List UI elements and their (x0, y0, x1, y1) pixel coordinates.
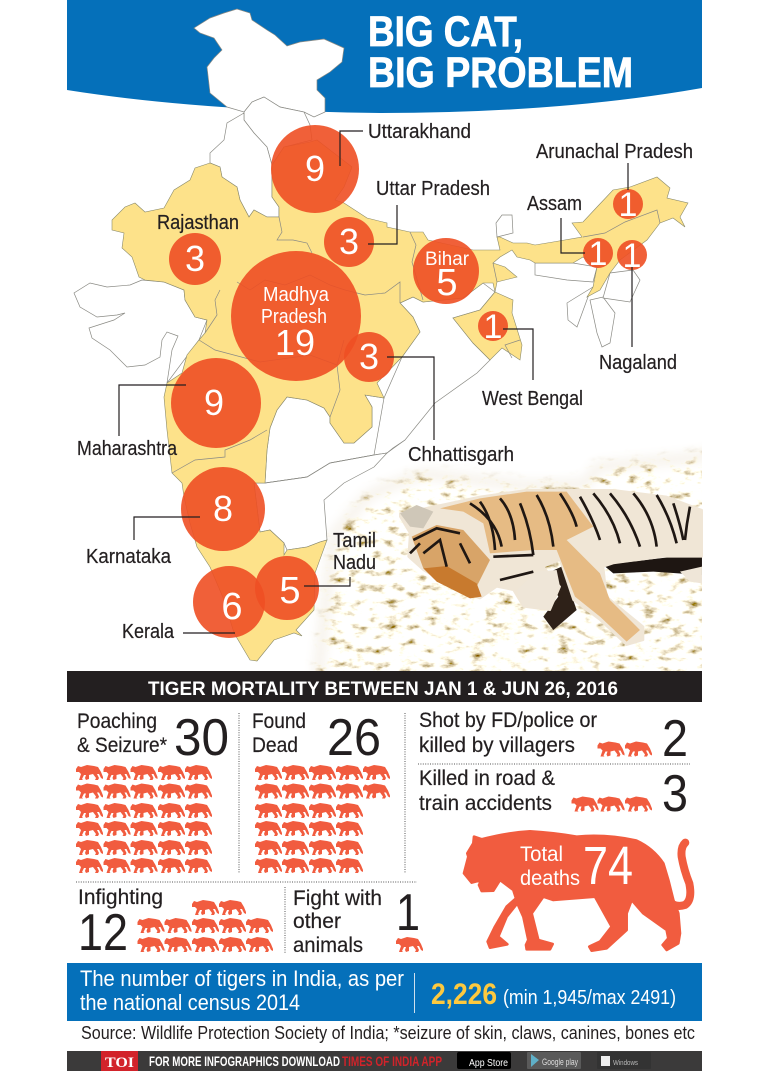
stat: poaching and seizure: Poaching (77, 710, 157, 733)
circle numbers: 5 (436, 262, 458, 304)
stat: road and train accidents (419, 765, 688, 823)
state labels: Nadu (333, 552, 376, 574)
white states: Jammu and Kashmir (194, 9, 344, 117)
footer bar: Windows (613, 1060, 638, 1067)
stat: fight with other animals: Fight with (293, 887, 382, 910)
header banner (67, 0, 702, 113)
stat: found dead: Found (252, 710, 306, 733)
circle numbers: 1 (619, 186, 637, 224)
stat: shot by forest department: Shot by FD/police or (419, 709, 597, 732)
title: BIG CAT, (368, 8, 523, 56)
source note: Source: Wildlife Protection Society of India; *seizure of skin, claws, canines, bones etc (81, 1023, 695, 1043)
circle numbers: 1 (589, 235, 607, 273)
circle numbers: 9 (305, 148, 325, 189)
stat: road and train accidents: 3 (662, 765, 688, 823)
stat: infighting: 12 (78, 904, 128, 962)
stat: poaching and seizure: & Seizure* (77, 734, 167, 757)
state labels: Uttarakhand (368, 121, 471, 143)
tiger icons: 30 (76, 765, 212, 873)
census band (67, 963, 702, 1021)
stat: infighting (78, 886, 273, 962)
footer bar: TIMES OF INDIA APP (342, 1053, 442, 1069)
circle numbers: 3 (185, 238, 205, 279)
state labels: Chhattisgarh (408, 444, 514, 466)
state labels: Tamil (333, 530, 376, 552)
footer bar: App Store (469, 1058, 508, 1069)
stat: found dead: Dead (252, 734, 298, 757)
leader lines (119, 131, 632, 633)
circle numbers: 3 (339, 221, 359, 262)
census band: 2,226 (431, 978, 497, 1011)
total deaths tiger (464, 831, 690, 951)
white states: north and west (74, 97, 640, 550)
stat: road and train accidents: train accidents (419, 792, 552, 815)
stat: infighting: Infighting (78, 886, 163, 909)
footer bar: TOI (105, 1055, 134, 1071)
dividers (76, 713, 690, 953)
state labels (77, 121, 693, 643)
tiger-death circles by state (169, 125, 647, 638)
section heading bar: TIGER MORTALITY BETWEEN JAN 1 & JUN 26, 2016 (148, 679, 618, 700)
footer bar (67, 1051, 702, 1071)
title (368, 8, 633, 97)
stat: road and train accidents: Killed in road & (419, 767, 555, 790)
total deaths tiger: deaths (520, 867, 580, 890)
stat: shot by forest department (419, 709, 688, 768)
total deaths tiger: Total (520, 843, 563, 866)
census band: The number of tigers in India, as per (80, 966, 404, 991)
state labels: Maharashtra (77, 438, 178, 460)
circle numbers: Madhya (263, 284, 330, 306)
state labels: West Bengal (482, 388, 583, 410)
footer bar: FOR MORE INFOGRAPHICS DOWNLOAD (149, 1053, 340, 1069)
circle numbers: 8 (213, 488, 233, 529)
census band: (min 1,945/max 2491) (503, 987, 676, 1009)
tiger icon: 1 (396, 937, 423, 952)
circle numbers: Bihar (425, 249, 470, 270)
state labels: Uttar Pradesh (376, 178, 490, 200)
tiger icons: 26 (255, 765, 390, 873)
stat: shot by forest department: 2 (662, 710, 688, 768)
circle numbers (185, 148, 641, 628)
stat: poaching and seizure: 30 (174, 709, 229, 767)
state labels: Arunachal Pradesh (536, 141, 693, 163)
stat: fight with other animals: other (293, 910, 341, 933)
stat: found dead: 26 (327, 709, 381, 767)
tiger icons: 2 (598, 742, 652, 756)
circle numbers: 6 (221, 586, 243, 628)
state labels: Nagaland (599, 352, 677, 374)
tiger icons: 3 (572, 796, 652, 812)
stat: poaching and seizure (76, 709, 229, 873)
circle numbers: 1 (623, 237, 641, 275)
circle numbers: Pradesh (261, 306, 327, 328)
photo: dead tiger on forest floor (300, 440, 702, 672)
circle numbers: 19 (275, 322, 315, 363)
stat: fight with other animals: 1 (396, 884, 420, 942)
circle numbers: 9 (204, 382, 224, 423)
total deaths tiger: 74 (583, 836, 633, 896)
circle numbers: 5 (279, 570, 301, 612)
stat: fight with other animals: animals (293, 934, 363, 957)
stat: found dead (252, 709, 390, 873)
map of India (74, 9, 688, 661)
state labels: Assam (527, 193, 582, 215)
circle numbers: 1 (484, 308, 502, 346)
icon: large tiger silhouette (464, 831, 690, 951)
state labels: Karnataka (86, 546, 172, 568)
stat: shot by forest department: killed by villagers (419, 734, 575, 757)
census band: the national census 2014 (80, 990, 300, 1015)
yellow states with tiger deaths (112, 140, 688, 661)
tiger icons: 12 (138, 900, 273, 952)
stat: fight with other animals (293, 884, 423, 957)
state labels: Kerala (122, 621, 175, 643)
circle numbers: 3 (359, 336, 379, 377)
footer bar: Google play (542, 1057, 578, 1067)
state labels: Rajasthan (157, 212, 239, 234)
section heading bar (67, 671, 702, 702)
state boundaries (172, 210, 660, 473)
title: BIG PROBLEM (368, 49, 633, 97)
